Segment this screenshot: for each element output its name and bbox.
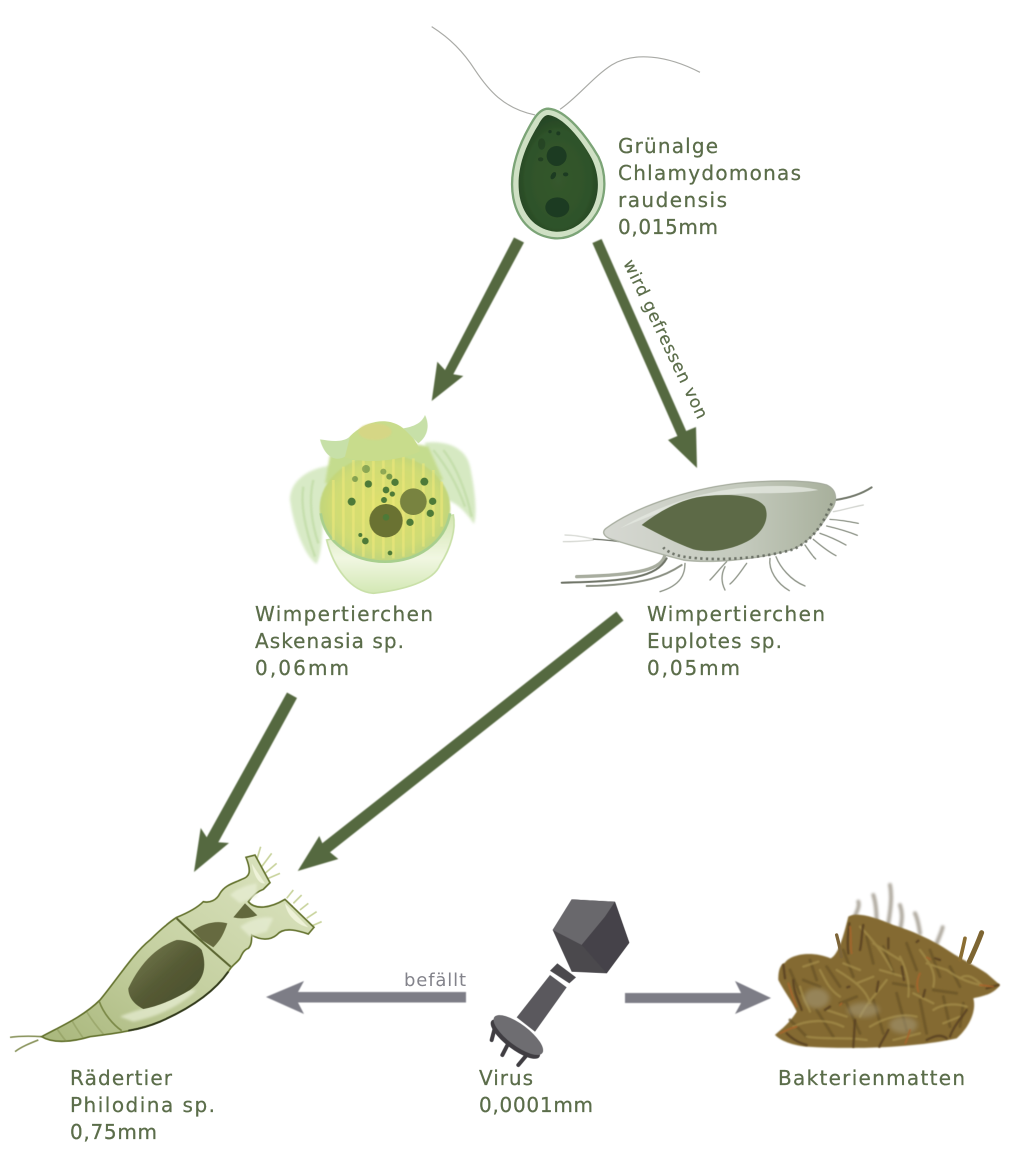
icon: bacterial mat — [775, 885, 1000, 1048]
membranelle edge — [663, 503, 832, 559]
organism: rotifer Philodina — [10, 847, 322, 1052]
label: Rädertier: Philodina sp. — [70, 1093, 215, 1117]
label: Euplotes: Euplotes sp. — [647, 629, 782, 653]
label: Askenasia: Askenasia sp. — [255, 629, 404, 653]
label: Grünalge: 0,015mm — [618, 215, 718, 239]
top dome — [338, 421, 420, 461]
main stomach organ — [128, 940, 204, 1009]
neck organ — [233, 903, 257, 918]
upright stalks — [837, 933, 982, 962]
head funnels — [252, 863, 265, 883]
lower dark edge — [128, 972, 228, 1031]
macronucleus — [642, 495, 767, 551]
icon: virus — [485, 899, 629, 1065]
tail stem — [517, 975, 567, 1032]
flagella — [432, 27, 700, 115]
label: Virus — [479, 1066, 593, 1117]
body outline — [42, 855, 314, 1041]
lower cup — [327, 515, 454, 593]
cell wall — [512, 109, 604, 238]
arrow: Euplotes to rotifer — [298, 612, 624, 871]
arrow: virus infects rotifer — [266, 981, 466, 1014]
left cilia wing — [290, 465, 335, 564]
cell interior — [519, 115, 598, 232]
label: Grünalge: Chlamydomonas — [618, 161, 801, 185]
arrow label: befällt: befällt — [404, 970, 466, 991]
body segments — [57, 918, 231, 1042]
label: Grünalge — [618, 134, 801, 239]
light fibres — [793, 927, 982, 1040]
capsid — [553, 899, 629, 973]
main body — [320, 455, 450, 562]
organelles — [538, 130, 569, 217]
arrow: virus to bacterial mats — [625, 981, 771, 1014]
arrow: Askenasia to rotifer — [194, 692, 297, 872]
label: Bakterienmatten: Bakterienmatten — [778, 1066, 965, 1090]
arrow: alga to Askenasia — [432, 238, 524, 401]
capsid light facet — [553, 899, 615, 945]
label: Virus: 0,0001mm — [479, 1093, 593, 1117]
label: Virus: Virus — [479, 1066, 533, 1090]
mid-tone texture — [790, 937, 963, 1037]
mat mass — [775, 915, 1000, 1048]
tail toes — [10, 1036, 42, 1052]
upper ears — [320, 437, 350, 459]
arrow: alga to Euplotes — [592, 239, 697, 468]
collar — [550, 963, 576, 983]
label: Rädertier: Rädertier — [70, 1066, 173, 1090]
vacuoles — [348, 465, 436, 555]
label: Rädertier: 0,75mm — [70, 1120, 157, 1144]
label: Euplotes — [647, 602, 825, 680]
frontal cirri — [562, 555, 682, 586]
corona cilia — [257, 847, 322, 926]
label: Euplotes: 0,05mm — [647, 656, 740, 680]
lower body rim — [321, 513, 450, 562]
label: Grünalge: Grünalge — [618, 134, 718, 158]
grey wisps — [853, 885, 943, 943]
label: Euplotes: Wimpertierchen — [647, 602, 825, 626]
dark fibres — [783, 923, 998, 1047]
upper body bridge — [325, 443, 443, 483]
organism: green alga Chlamydomonas — [432, 27, 700, 238]
label: Grünalge: raudensis — [618, 188, 727, 212]
shell highlight — [620, 486, 818, 528]
wing fringes — [302, 450, 472, 557]
arrow label: wird gefressen von: wird gefressen von — [618, 257, 711, 422]
label: Rädertier — [70, 1066, 215, 1144]
base plate — [485, 1008, 549, 1065]
label: Askenasia: 0,06mm — [255, 656, 349, 680]
capsid dark facet — [582, 902, 629, 973]
light highlights — [120, 883, 273, 1022]
mid organ — [193, 922, 227, 947]
right cilia wing — [425, 442, 476, 524]
spikes — [492, 1023, 527, 1065]
shell — [604, 481, 835, 561]
label: Askenasia: Wimpertierchen — [255, 602, 433, 626]
label: Askenasia — [255, 602, 433, 680]
cilia — [563, 487, 872, 592]
organism: ciliate Askenasia — [290, 415, 476, 593]
grey-beige patches — [804, 988, 917, 1033]
nuclei — [369, 488, 427, 537]
organism: ciliate Euplotes — [562, 481, 872, 592]
ciliary stripes — [333, 453, 442, 558]
orange fibres — [780, 927, 993, 1043]
